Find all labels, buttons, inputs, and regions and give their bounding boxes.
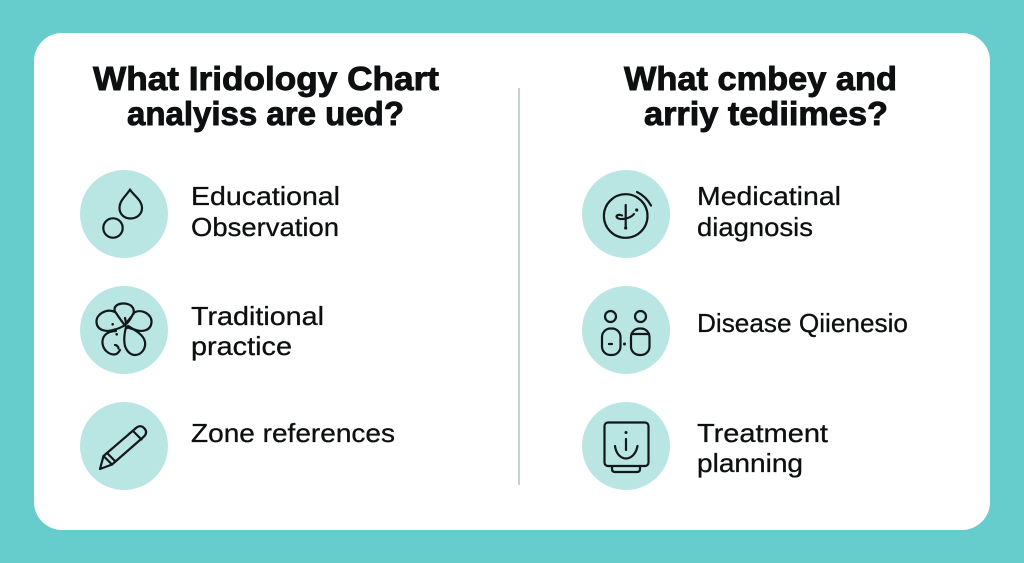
label: Zone references: Zone references — [191, 418, 395, 448]
left column — [80, 60, 439, 490]
divider — [518, 88, 520, 485]
label: Educational Observation: Educational — [191, 181, 340, 211]
label: Medicatinal diagnosis — [697, 181, 841, 242]
heading: left — [93, 60, 439, 132]
label: Medicatinal diagnosis: diagnosis — [697, 212, 813, 242]
heading: right: What cmbey and — [624, 60, 897, 97]
label: Treatment planning — [697, 418, 829, 478]
icon: medical dial — [582, 170, 670, 258]
heading: right: arriy tediimes? — [644, 95, 888, 132]
icon: two figures — [582, 286, 670, 374]
label: Disease Qiienesio: Disease Qiienesio — [697, 308, 908, 338]
right column — [582, 60, 908, 490]
label: Medicatinal diagnosis: Medicatinal — [697, 181, 841, 211]
icon: water drops — [80, 170, 168, 258]
heading: left: analyiss are ued? — [127, 95, 404, 132]
icon: info panel — [582, 402, 670, 490]
label: Treatment planning: planning — [697, 448, 803, 478]
heading: left: What Iridology Chart — [93, 60, 439, 97]
label: Educational Observation — [191, 181, 340, 242]
label: Educational Observation: Observation — [191, 212, 339, 242]
label: Traditional practice — [191, 301, 324, 361]
heading: right — [624, 60, 897, 132]
icon: flower — [80, 286, 168, 374]
label: Treatment planning: Treatment — [697, 418, 829, 448]
label: Traditional practice: practice — [191, 331, 292, 361]
label: Traditional practice: Traditional — [191, 301, 324, 331]
icon: pencil — [80, 402, 168, 490]
